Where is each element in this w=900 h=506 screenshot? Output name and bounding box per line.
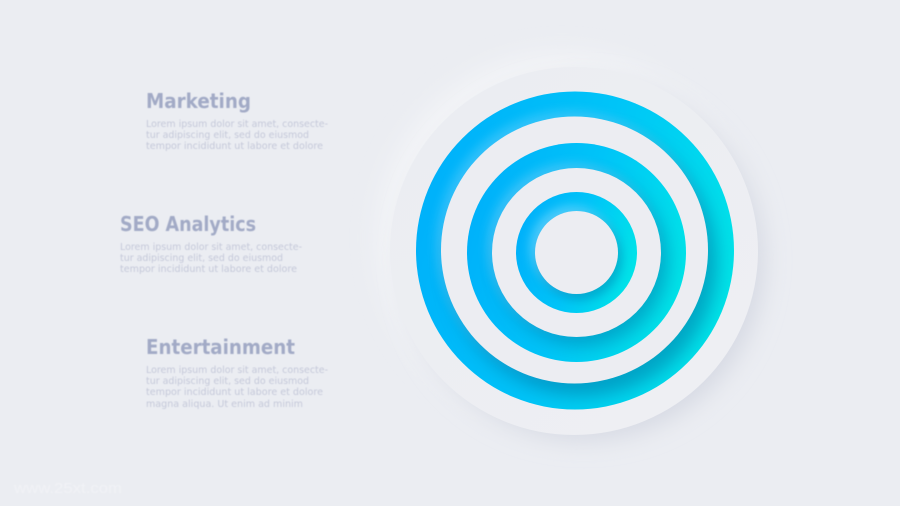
text block: Marketing: Marketing bbox=[146, 89, 251, 113]
watermark: www.25xt.com bbox=[13, 480, 122, 497]
inner blue ring bbox=[516, 192, 637, 313]
text block: Entertainment: tur adipiscing elit, sed do eiusmod bbox=[146, 376, 309, 387]
panel: target diagram bbox=[416, 92, 767, 443]
plate shadows bbox=[378, 54, 764, 440]
outer blue ring bbox=[416, 92, 734, 410]
outer plate disc bbox=[390, 67, 758, 435]
text block: Marketing: tur adipiscing elit, sed do eiusmod bbox=[146, 130, 309, 141]
first white disc bbox=[441, 116, 708, 384]
second white disc bbox=[492, 168, 661, 337]
text block: SEO Analytics: tur adipiscing elit, sed do eiusmod bbox=[120, 253, 283, 264]
text block: SEO Analytics: Lorem ipsum dolor sit amet, consecte- bbox=[120, 242, 302, 253]
text block: Entertainment: Entertainment bbox=[146, 335, 295, 359]
text block: Marketing: Lorem ipsum dolor sit amet, consecte- bbox=[146, 119, 328, 130]
text block: SEO Analytics: tempor incididunt ut labore et dolore bbox=[120, 264, 297, 275]
text block: SEO Analytics bbox=[120, 212, 302, 275]
text block: Entertainment: Lorem ipsum dolor sit amet, consecte- bbox=[146, 365, 328, 376]
text block: Marketing: tempor incididunt ut labore et dolore bbox=[146, 141, 323, 152]
text block: SEO Analytics: SEO Analytics bbox=[120, 212, 256, 236]
middle blue ring bbox=[467, 143, 686, 362]
text block: Entertainment bbox=[146, 335, 328, 410]
text block: Marketing bbox=[146, 89, 328, 152]
text block: Entertainment: tempor incididunt ut labore et dolore bbox=[146, 387, 323, 398]
centre white disc bbox=[535, 211, 618, 294]
text block: Entertainment: magna aliqua. Ut enim ad minim bbox=[146, 399, 303, 410]
